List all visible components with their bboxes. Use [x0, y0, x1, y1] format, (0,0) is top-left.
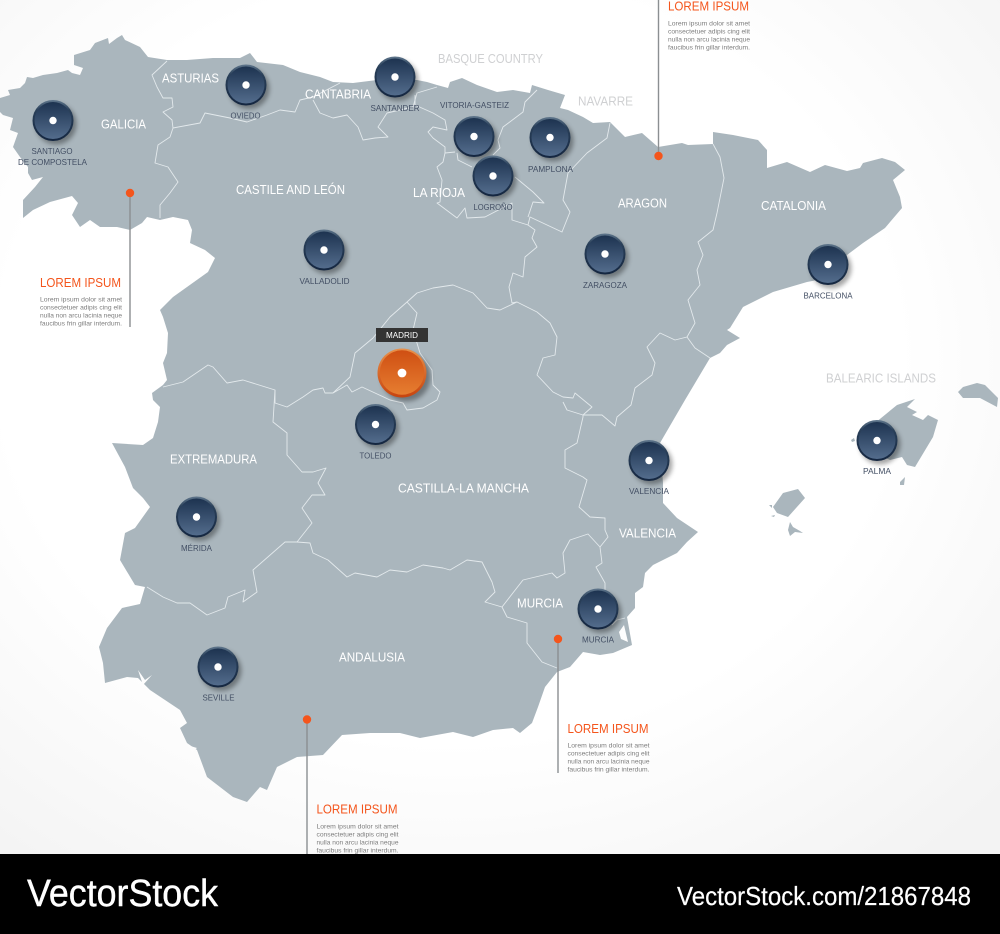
city: Valencia: VALENCIA [629, 486, 669, 496]
callout: Andalusia: consectetuer adipis cing elit [316, 832, 399, 838]
label: Castilla-La Mancha: CASTILLA-LA MANCHA [398, 482, 530, 496]
callout: Andalusia: nulla non arcu lacinia neque [316, 840, 399, 846]
city: Pamplona: PAMPLONA [528, 164, 573, 174]
label: Murcia: MURCIA [517, 596, 564, 610]
callout: top Aragon: faucibus frin gillar interdum. [668, 44, 750, 52]
city: Murcia: MURCIA [582, 634, 614, 644]
label: Valencia: VALENCIA [619, 526, 677, 540]
mainland silhouette [0, 35, 905, 802]
tag: Madrid: MADRID [386, 330, 418, 340]
callout: Galicia: LOREM IPSUM [40, 275, 121, 290]
label: Asturias: ASTURIAS [162, 72, 219, 86]
callout: Murcia [554, 635, 650, 774]
label: Cantabria: CANTABRIA [305, 88, 372, 102]
Balearic islands [769, 383, 998, 536]
callout: top Aragon: Lorem ipsum dolor sit amet [668, 20, 750, 28]
city: Zaragoza: ZARAGOZA [583, 280, 627, 290]
pin: Palma [856, 420, 900, 464]
label: Balearic Islands: BALEARIC ISLANDS [826, 372, 936, 386]
callout: Andalusia [303, 715, 399, 854]
label: Catalonia: CATALONIA [761, 199, 827, 213]
label: Galicia: GALICIA [101, 118, 147, 132]
callout: Murcia: faucibus frin gillar interdum. [568, 766, 650, 774]
pin: Zaragoza [584, 234, 628, 278]
pin: Valencia [628, 440, 672, 484]
city: Valladolid: VALLADOLID [300, 276, 350, 286]
pin: Valladolid [304, 230, 348, 274]
region borders [147, 61, 724, 668]
pin: Vitoria-Gasteiz [454, 116, 498, 160]
city: Mérida: MÉRIDA [181, 543, 212, 553]
callout: Murcia: nulla non arcu lacinia neque [568, 758, 650, 766]
city: Barcelona: BARCELONA [804, 290, 853, 300]
pin: Mérida [176, 496, 220, 541]
footer watermark band: VectorStock.com/21867848 [677, 881, 971, 911]
city: Palma: PALMA [863, 466, 891, 476]
callout: top Aragon: consectetuer adipis cing elit [668, 28, 750, 36]
pin: Seville [198, 646, 242, 691]
city: de Compostela: DE COMPOSTELA [18, 157, 87, 167]
pin: Santiago de Compostela [32, 100, 76, 144]
city: Seville: SEVILLE [202, 692, 235, 702]
pin: Toledo [355, 404, 399, 448]
city: Oviedo: OVIEDO [230, 110, 261, 120]
city: Santiago: SANTIAGO [32, 146, 73, 156]
pin: Logroño [472, 156, 516, 200]
footer watermark band: VectorStock [27, 873, 219, 915]
label: Basque Country: BASQUE COUNTRY [438, 52, 544, 66]
pin: Oviedo [226, 64, 270, 109]
footer watermark band [0, 854, 1000, 934]
label: La Rioja: LA RIOJA [413, 186, 466, 200]
pin: Barcelona [808, 244, 852, 288]
callout: top Aragon [654, 0, 750, 160]
callout: Murcia: Lorem ipsum dolor sit amet [568, 742, 650, 750]
callout: top Aragon: nulla non arcu lacinia neque [668, 36, 750, 44]
label: Castile and León: CASTILE AND LEÓN [236, 182, 345, 197]
callout: Galicia: faucibus frin gillar interdum. [40, 320, 122, 328]
lagoons and inlets [138, 625, 628, 752]
city: Logroño: LOGROÑO [474, 202, 513, 212]
label: Aragon: ARAGON [618, 196, 667, 210]
pin: Murcia [578, 588, 622, 633]
callout: Andalusia: Lorem ipsum dolor sit amet [316, 824, 399, 830]
callout: Andalusia: faucibus frin gillar interdum. [316, 848, 399, 854]
callout: Murcia: consectetuer adipis cing elit [568, 750, 650, 758]
city: Santander: SANTANDER [370, 103, 420, 113]
pin: Santander [374, 56, 418, 101]
callout: Murcia: LOREM IPSUM [568, 721, 648, 736]
city: Vitoria-Gasteiz: VITORIA-GASTEIZ [440, 100, 509, 110]
callout: Galicia: nulla non arcu lacinia neque [40, 312, 122, 320]
label: Navarre: NAVARRE [578, 94, 633, 108]
tag: Madrid [376, 328, 428, 342]
callout: Galicia: consectetuer adipis cing elit [40, 304, 122, 312]
callout: Andalusia: LOREM IPSUM [316, 802, 398, 816]
city: Toledo: TOLEDO [360, 450, 392, 460]
pin: Madrid capital [378, 348, 430, 402]
label: Extremadura: EXTREMADURA [170, 452, 258, 466]
callout: Galicia [40, 189, 134, 328]
region labels [101, 52, 936, 664]
pin: Pamplona [530, 117, 574, 162]
label: Andalusia: ANDALUSIA [339, 650, 406, 664]
callout: Galicia: Lorem ipsum dolor sit amet [40, 296, 122, 304]
city labels [18, 100, 891, 702]
